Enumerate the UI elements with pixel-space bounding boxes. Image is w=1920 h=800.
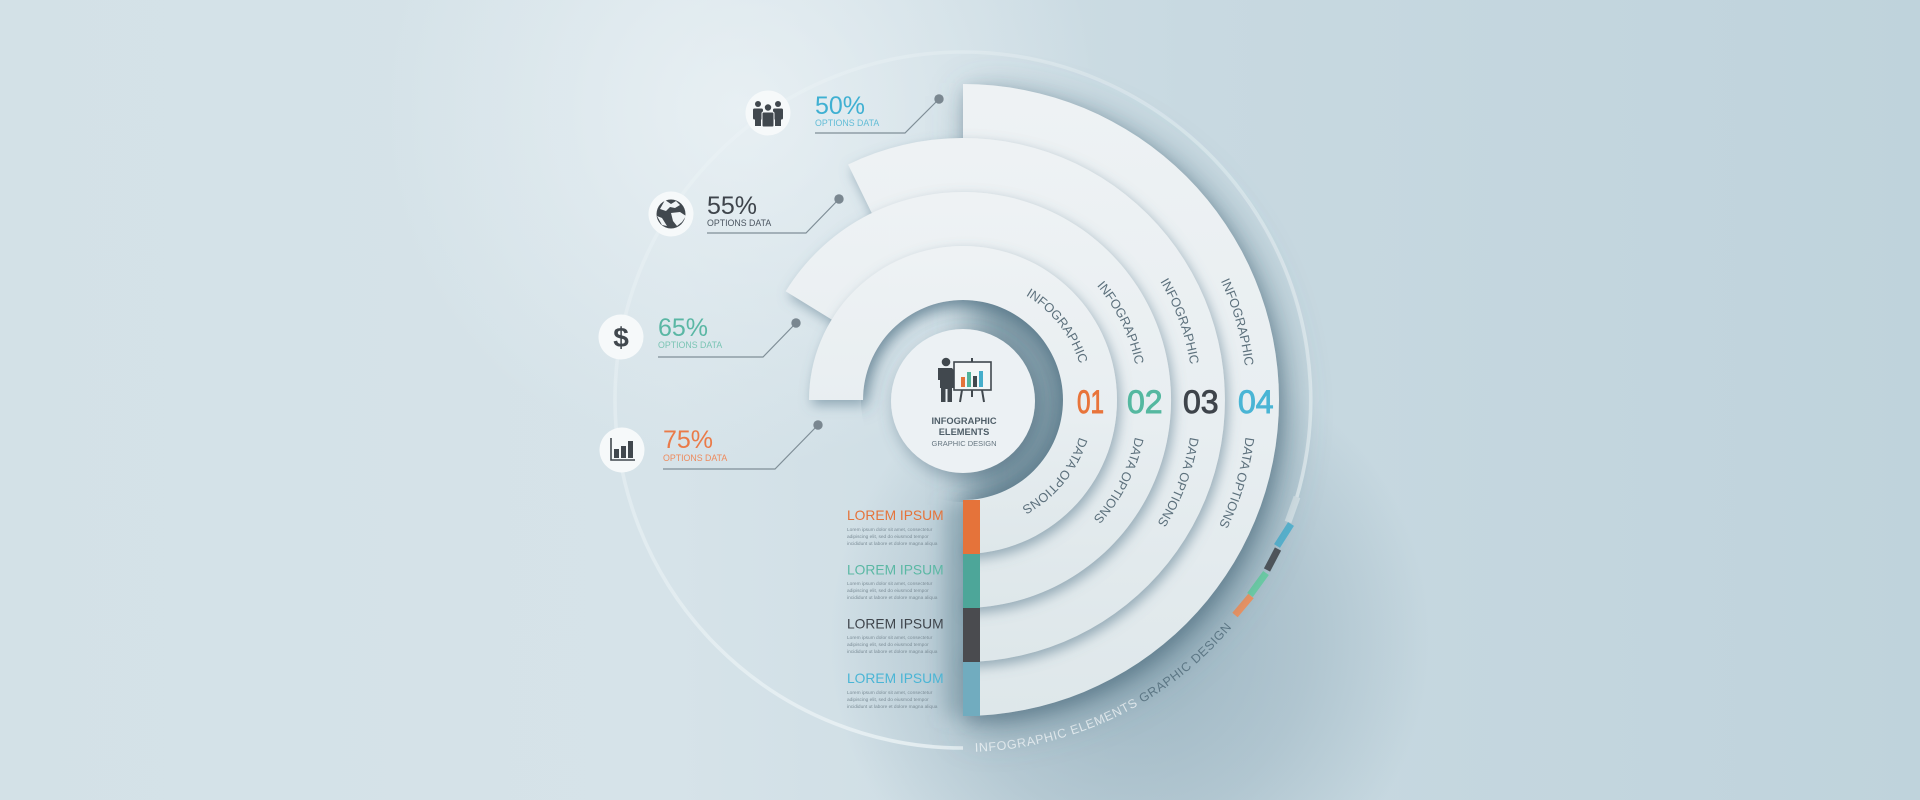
centre title: GRAPHIC DESIGN: [931, 439, 997, 448]
step numbers: 01: [1077, 384, 1104, 420]
arc labels: DATA OPTIONS: DATA OPTIONS: [1220, 438, 1254, 528]
step numbers: 02: [1127, 384, 1163, 420]
icon: people: [746, 90, 790, 136]
centre title: [931, 416, 997, 448]
infographic canvas: [488, 0, 1920, 800]
bar shadow: [945, 505, 967, 715]
callout 50%: OPTIONS DATA: [815, 118, 879, 128]
callout 65%: OPTIONS DATA: [658, 340, 722, 350]
arc labels: DATA OPTIONS: [1023, 438, 1254, 528]
lorem block blue: incididunt ut labore et dolore magna aliqua: [847, 704, 938, 710]
callout 75%: OPTIONS DATA: [663, 453, 727, 463]
lorem block dark: incididunt ut labore et dolore magna aliqua: [847, 649, 938, 655]
arc labels: DATA OPTIONS: DATA OPTIONS: [1158, 438, 1199, 526]
callout 50%: 50%: [815, 92, 865, 120]
lorem block green: incididunt ut labore et dolore magna aliqua: [847, 595, 938, 601]
lorem block blue: adipiscing elit, sed do eiusmod tempor: [847, 697, 929, 703]
arc labels: INFOGRAPHIC: INFOGRAPHIC: [1026, 288, 1087, 363]
step numbers: 03: [1183, 384, 1219, 420]
icon: dollar: [598, 314, 644, 360]
arc labels: DATA OPTIONS: DATA OPTIONS: [1094, 438, 1144, 523]
lorem block green: [847, 562, 944, 601]
lorem block blue: LOREM IPSUM: [847, 671, 944, 686]
lorem block green: LOREM IPSUM: [847, 562, 944, 578]
callout 65%: 65%: [658, 314, 708, 342]
lorem block blue: [847, 671, 944, 710]
arc labels: DATA OPTIONS: DATA OPTIONS: [1023, 438, 1088, 514]
lorem block green: Lorem ipsum dolor sit amet, consectetur: [847, 581, 933, 587]
lorem block dark: LOREM IPSUM: [847, 616, 944, 632]
outer ring: [615, 52, 1311, 748]
arc labels: INFOGRAPHIC: [1026, 278, 1254, 366]
arc labels: INFOGRAPHIC: INFOGRAPHIC: [1098, 280, 1144, 364]
lorem block orange: [847, 508, 944, 547]
callout 55%: [648, 192, 844, 236]
arc labels: INFOGRAPHIC: INFOGRAPHIC: [1160, 278, 1198, 364]
centre circle: [891, 329, 1035, 473]
lorem block dark: [847, 616, 944, 655]
callout 65%: [598, 314, 801, 360]
arc 02: [786, 192, 1171, 608]
callout 75%: [600, 420, 823, 472]
lorem block dark: Lorem ipsum dolor sit amet, consectetur: [847, 635, 933, 641]
callout 55%: 55%: [707, 192, 757, 220]
colored ring segments: [1235, 497, 1297, 615]
callout 55%: OPTIONS DATA: [707, 218, 771, 228]
wheel ground shadow: [971, 96, 1287, 728]
lorem block orange: adipiscing elit, sed do eiusmod tempor: [847, 534, 929, 540]
step numbers: 04: [1238, 384, 1274, 420]
arc labels: INFOGRAPHIC: INFOGRAPHIC: [1221, 278, 1254, 366]
lorem block dark: adipiscing elit, sed do eiusmod tempor: [847, 642, 929, 648]
icon: dollar: $: [613, 322, 629, 353]
lorem block orange: LOREM IPSUM: [847, 508, 944, 523]
step numbers: [1077, 384, 1274, 420]
centre hole shading: [861, 300, 1063, 502]
icon: globe: [648, 192, 694, 236]
icon: bar chart: [600, 428, 644, 472]
arc 01: [809, 246, 1117, 554]
callout 50%: [746, 90, 944, 136]
arc 03: [848, 138, 1225, 662]
lorem block green: adipiscing elit, sed do eiusmod tempor: [847, 588, 929, 594]
icon: presenter at board: [938, 358, 991, 402]
curved title text: INFOGRAPHIC ELEMENTS GRAPHIC DESIGN: [976, 622, 1231, 752]
centre title: INFOGRAPHIC: [931, 416, 997, 426]
lorem block blue: Lorem ipsum dolor sit amet, consectetur: [847, 690, 933, 696]
lorem block orange: incididunt ut labore et dolore magna aliqua: [847, 541, 938, 547]
arc 04: [963, 84, 1279, 716]
centre title: ELEMENTS: [939, 427, 989, 437]
colored bars: [963, 500, 980, 716]
callout 75%: 75%: [663, 426, 713, 454]
lorem block orange: Lorem ipsum dolor sit amet, consectetur: [847, 527, 933, 533]
